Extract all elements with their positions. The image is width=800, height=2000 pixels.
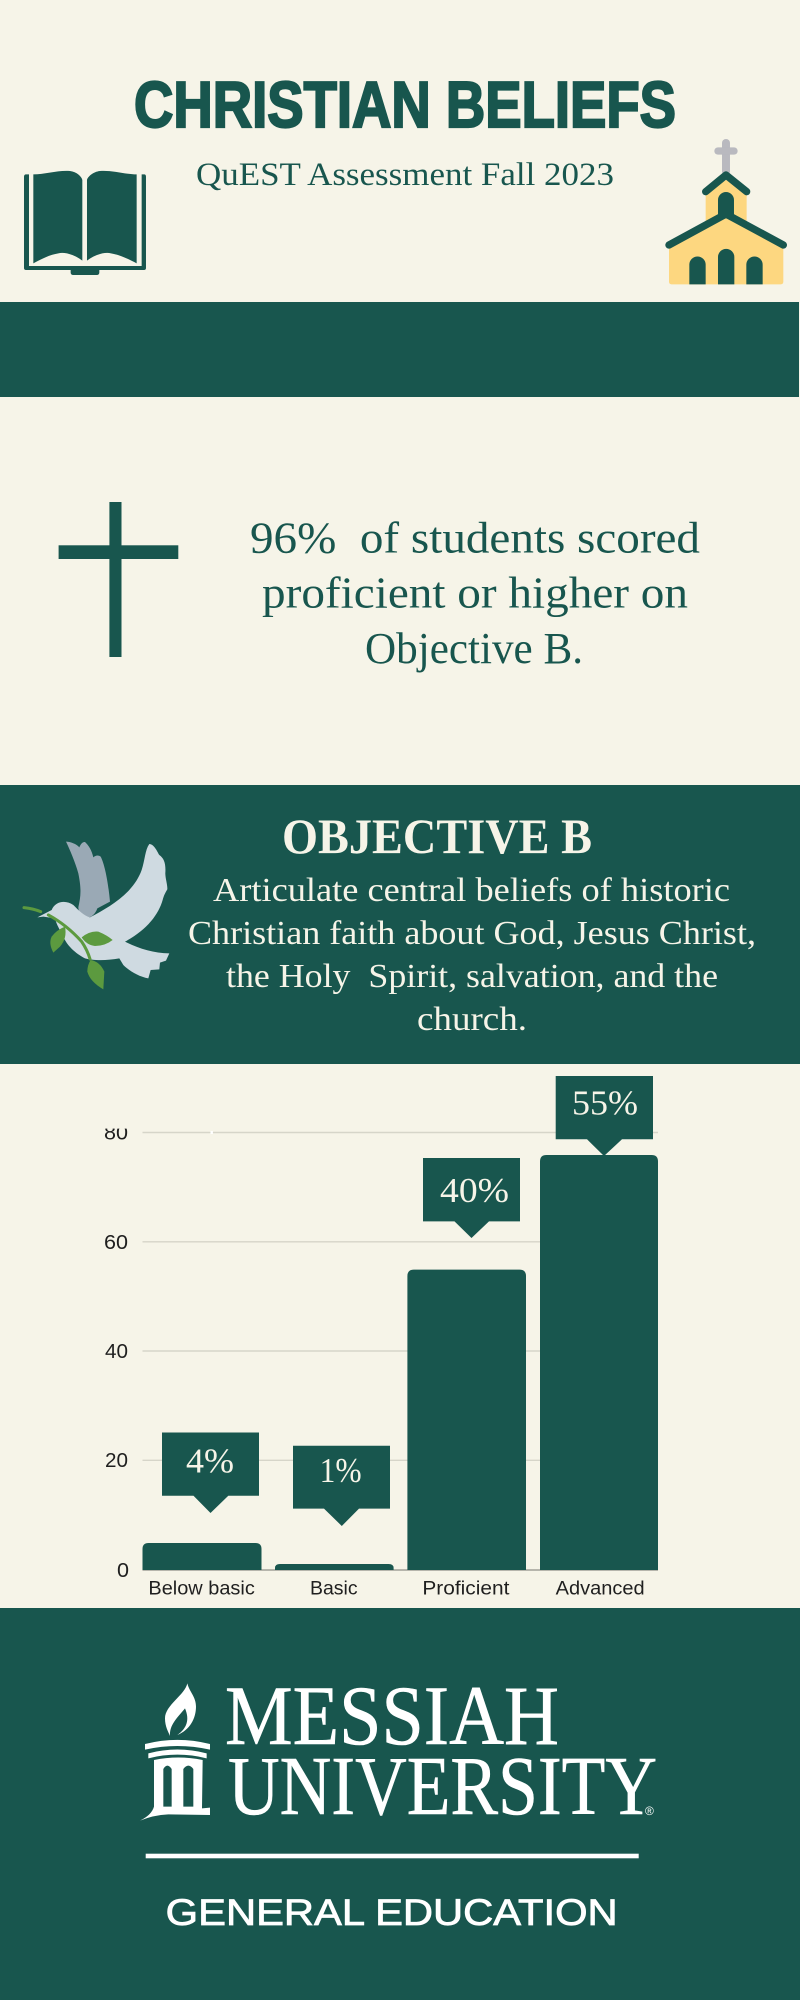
panel: key statistic	[59, 502, 700, 673]
statistic text: proficient or higher on	[262, 568, 688, 618]
callout: 4%: 4%	[186, 1442, 234, 1480]
callout: 55%: 55%	[572, 1084, 638, 1123]
panel: empty green band	[0, 302, 799, 397]
objective description: the Holy Spirit, salvation, and the	[226, 958, 718, 995]
icon: dove with olive branch	[24, 842, 169, 989]
logo wordmark: MESSIAH	[225, 1669, 559, 1763]
objective description	[188, 872, 756, 1038]
y axis tick labels: 20	[105, 1450, 128, 1472]
x axis labels: Basic	[310, 1579, 358, 1600]
logo wordmark: UNIVERSITY	[228, 1740, 657, 1833]
objective description: Christian faith about God, Jesus Christ,	[188, 915, 756, 952]
objective description: Articulate central beliefs of historic	[213, 872, 730, 909]
callout: 55%	[556, 1076, 653, 1156]
logo wordmark	[225, 1669, 657, 1833]
bar chart	[100, 1076, 658, 1600]
statistic text: Objective B.	[365, 624, 583, 673]
general education label: GENERAL EDUCATION	[166, 1892, 618, 1933]
panel: footer	[0, 1608, 800, 2000]
y axis tick labels: 60	[104, 1232, 128, 1254]
y axis tick labels	[100, 1115, 136, 1582]
statistic text: 96% of students scored	[250, 514, 700, 562]
icon: open book	[24, 171, 146, 275]
divider line	[146, 1854, 639, 1858]
icon: church	[669, 139, 783, 284]
bars	[142, 1155, 658, 1570]
icon: cross	[59, 502, 178, 657]
icon: university torch logo	[140, 1683, 210, 1821]
panel: header	[24, 68, 783, 284]
panel: objective B	[0, 785, 800, 1064]
callout: 40%: 40%	[440, 1171, 509, 1210]
x axis labels: Proficient	[422, 1579, 510, 1600]
subtitle: QuEST Assessment Fall 2023	[196, 157, 614, 193]
y axis tick labels: 80	[104, 1123, 128, 1145]
callout: 4%	[162, 1432, 259, 1513]
callout: 1%	[293, 1446, 390, 1526]
title: CHRISTIAN BELIEFS	[134, 68, 676, 141]
x axis labels: Below basic	[148, 1579, 255, 1600]
logo wordmark: ®	[645, 1804, 654, 1818]
x axis labels: Advanced	[556, 1579, 645, 1600]
y axis tick labels: 40	[105, 1341, 128, 1363]
statistic text	[250, 514, 700, 673]
callout: 1%: 1%	[320, 1451, 362, 1490]
heading: OBJECTIVE B	[282, 808, 592, 864]
y axis tick labels: 0	[117, 1560, 129, 1582]
x axis labels	[148, 1579, 645, 1600]
callout: 40%	[423, 1158, 520, 1238]
objective description: church.	[417, 1001, 527, 1038]
